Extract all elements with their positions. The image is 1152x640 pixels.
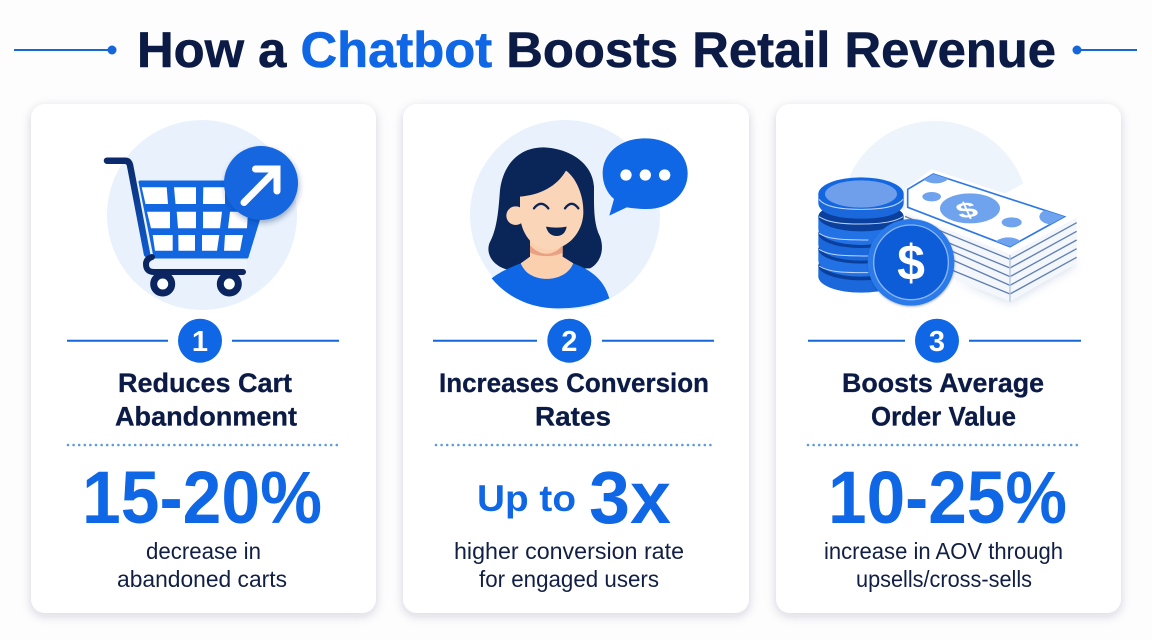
description: higher conversion rate <box>454 538 684 564</box>
coin stack <box>818 177 904 293</box>
bill stack <box>905 169 1077 302</box>
stat: 10-25%: 10-25% <box>828 456 1067 539</box>
icon: coins and banknotes: $ <box>897 235 925 291</box>
front coin <box>868 219 954 306</box>
description <box>824 538 1063 592</box>
number badge 3 <box>808 319 1081 363</box>
description: for engaged users <box>479 566 659 592</box>
heading <box>439 368 709 432</box>
stat: up to 3x: Up to <box>477 478 576 519</box>
description <box>117 538 287 592</box>
heading: Rates <box>535 402 611 432</box>
heading <box>115 368 297 432</box>
title: How a Chatbot Boosts Retail Revenue <box>137 22 1056 78</box>
number badge 2 <box>433 319 714 363</box>
panel: reduces cart abandonment <box>31 104 376 613</box>
icon: smiling woman with speech bubble <box>470 120 688 310</box>
number badge 2: 2 <box>561 326 577 358</box>
icon: coins and banknotes <box>818 121 1077 306</box>
stat: up to 3x: 3x <box>589 456 671 539</box>
heading: Increases Conversion <box>439 368 709 398</box>
panel: increases conversion rates <box>403 104 749 613</box>
description: abandoned carts <box>117 566 287 592</box>
number badge 3: 3 <box>929 326 945 358</box>
heading: Boosts Average <box>842 368 1044 398</box>
description: decrease in <box>146 538 261 564</box>
number badge 1 <box>67 319 339 363</box>
stat: 15-20%: 15-20% <box>82 456 322 539</box>
heading: Reduces Cart <box>118 368 292 398</box>
stat: up to 3x <box>477 456 671 539</box>
description: increase in AOV through <box>824 538 1063 564</box>
heading: Order Value <box>871 402 1016 432</box>
number badge 1: 1 <box>192 326 208 358</box>
icon: coins and banknotes: $ <box>952 198 982 224</box>
description <box>454 538 684 592</box>
description: upsells/cross-sells <box>856 566 1032 592</box>
panel: boosts average order value <box>776 104 1121 613</box>
icon: shopping cart with arrow <box>107 120 298 310</box>
heading: Abandonment <box>115 402 297 432</box>
heading <box>842 368 1044 432</box>
